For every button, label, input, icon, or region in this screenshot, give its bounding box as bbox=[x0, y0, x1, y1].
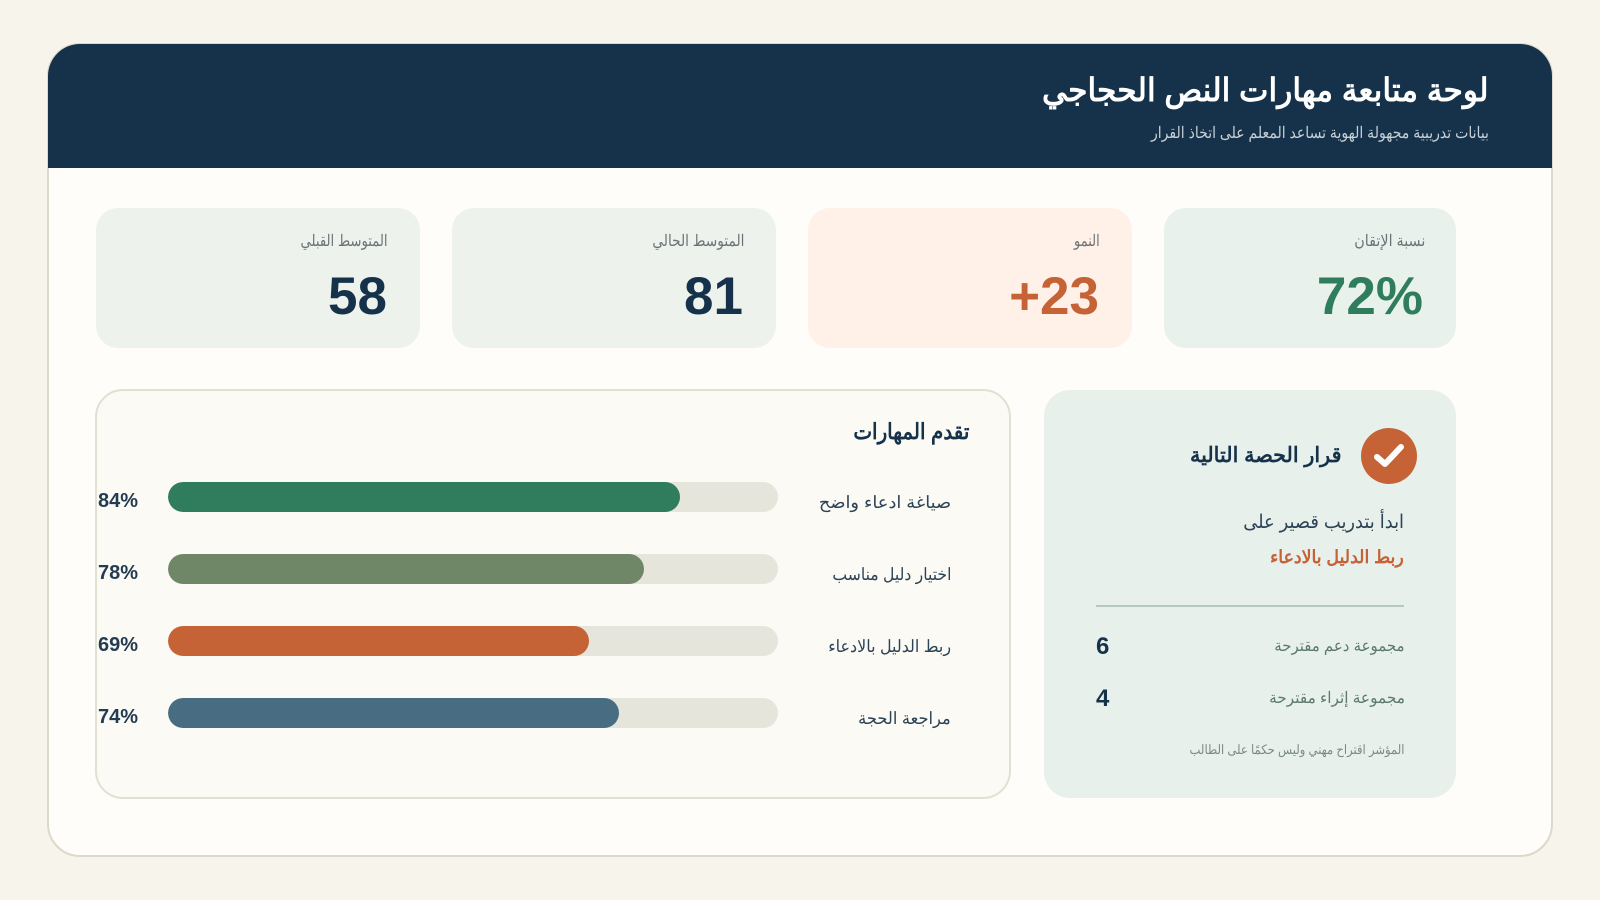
percent: 78% bbox=[98, 562, 138, 584]
recommendation line: ابدأ بتدريب قصير على bbox=[1243, 512, 1404, 533]
skill row: linking evidence bbox=[98, 626, 951, 656]
bar bbox=[168, 482, 778, 512]
title: لوحة متابعة مهارات النص الحجاجي bbox=[1042, 72, 1489, 108]
stat label: المتوسط القبلي bbox=[301, 233, 388, 250]
label: مجموعة دعم مقترحة bbox=[1275, 638, 1405, 655]
stat: mastery rate bbox=[1164, 208, 1456, 348]
bar bbox=[168, 626, 778, 656]
stat value: +23 bbox=[1009, 267, 1099, 326]
stat label: نسبة الإتقان bbox=[1354, 233, 1425, 250]
header band bbox=[48, 44, 1552, 168]
bar bbox=[168, 698, 778, 728]
stat: previous average bbox=[96, 208, 420, 348]
icon: check badge bbox=[1361, 428, 1417, 484]
label: مجموعة إثراء مقترحة bbox=[1269, 690, 1405, 707]
stat value: 58 bbox=[328, 267, 387, 326]
percent: 74% bbox=[98, 706, 138, 728]
skill label: ربط الدليل بالادعاء bbox=[828, 637, 951, 656]
divider bbox=[1096, 605, 1404, 607]
stat: current average bbox=[452, 208, 776, 348]
panel: skills progress bbox=[95, 389, 1011, 799]
subtitle: بيانات تدريبية مجهولة الهوية تساعد المعلم على اتخاذ القرار bbox=[1151, 125, 1489, 142]
panel heading: قرار الحصة التالية bbox=[1189, 444, 1341, 467]
recommended skill: ربط الدليل بالادعاء bbox=[1270, 547, 1404, 567]
skill label: اختيار دليل مناسب bbox=[832, 565, 951, 584]
skill row: clear claim bbox=[98, 482, 951, 512]
panel: next lesson decision bbox=[1044, 390, 1456, 798]
footnote: المؤشر اقتراح مهني وليس حكمًا على الطالب bbox=[1189, 742, 1404, 757]
skill label: صياغة ادعاء واضح bbox=[819, 493, 951, 512]
stat label: المتوسط الحالي bbox=[652, 233, 744, 250]
panel heading: تقدم المهارات bbox=[853, 419, 969, 444]
value: 4 bbox=[1096, 685, 1109, 712]
value: 6 bbox=[1096, 633, 1109, 660]
stat label: النمو bbox=[1074, 233, 1100, 250]
stat: growth bbox=[808, 208, 1132, 348]
percent: 69% bbox=[98, 634, 138, 656]
skill row: argument review bbox=[98, 698, 951, 728]
stat value: 72% bbox=[1317, 267, 1423, 326]
skill label: مراجعة الحجة bbox=[858, 709, 951, 728]
support groups row bbox=[1096, 633, 1405, 660]
percent: 84% bbox=[98, 490, 138, 512]
stat value: 81 bbox=[684, 267, 743, 326]
skill row: suitable evidence bbox=[98, 554, 951, 584]
enrichment groups row bbox=[1096, 685, 1405, 712]
bar bbox=[168, 554, 778, 584]
